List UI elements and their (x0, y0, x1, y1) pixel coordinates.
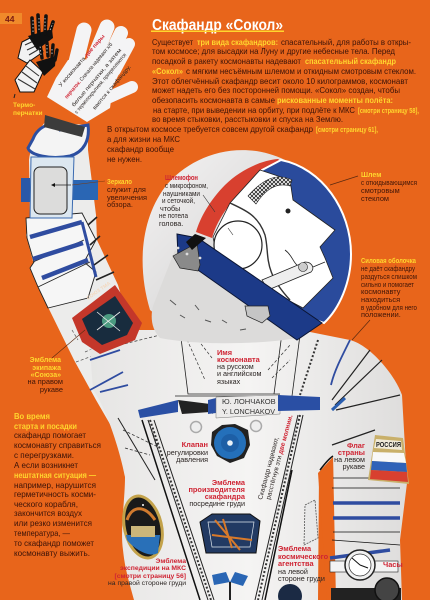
intro paragraph: Этот облегчённый скафандр весит около 10 килограммов, космонавт (152, 76, 408, 86)
red strip (196, 159, 282, 238)
glove caption: У космонавта две пары (58, 33, 107, 88)
label: space agency emblem: агентства (278, 559, 314, 568)
label: manufacturer emblem: скафандра (205, 492, 246, 501)
label: flag: на левом (334, 455, 365, 464)
label: restraint layer: находиться (361, 295, 400, 304)
label: mirror: обзора. (107, 200, 133, 209)
label: space agency emblem: космического (278, 552, 329, 561)
label: helmet: с откидывающимся (361, 178, 417, 187)
intro paragraph: а для жизни на МКС (107, 134, 180, 144)
glove with text: ваются к скафандру. (92, 65, 133, 111)
intro paragraph: спасательный, для работы в откры- (281, 37, 411, 47)
label: gloves: перчатки (13, 110, 43, 117)
name text (222, 397, 276, 416)
side text: launch and landing: с перегрузками. (14, 450, 74, 460)
label: flag: рукаве (342, 462, 365, 471)
label: cosmonaut name: космонавта (217, 355, 261, 364)
title: Скафандр «Сокол» (152, 17, 283, 34)
helmet (143, 150, 351, 343)
label: restraint layer: Силовая оболочка (361, 257, 416, 265)
blue collar bottom fastener (212, 572, 302, 600)
label: helmet: Шлем (361, 172, 381, 179)
visor interior (213, 170, 335, 308)
intro paragraph: посадкой в ракету космонавты надевают (152, 56, 301, 66)
label: mirror: Зеркало (107, 179, 132, 186)
label: mirror: служит для (107, 185, 146, 194)
name text: Ю. ЛОНЧАКОВ (222, 397, 276, 406)
label: cosmonaut name: на русском (217, 362, 254, 371)
arrow: helmet (330, 176, 358, 185)
label: headset: с микрофоном, (165, 181, 208, 190)
label: gloves (13, 102, 43, 117)
helmet lower neck dam (152, 250, 298, 343)
glove with text: белые перчатки, а затем (71, 47, 123, 108)
label: mirror (107, 179, 147, 209)
emblem: Soyuz crew patch (72, 281, 142, 354)
label: gloves: Термо- (13, 102, 35, 109)
mirror on cuff (21, 157, 98, 218)
label: restraint layer: положении. (361, 310, 401, 319)
label: restraint layer: в удобном для него (361, 303, 417, 312)
label: helmet: стеклом (361, 194, 389, 203)
label: space agency emblem: стороне груди (278, 574, 325, 583)
intro paragraph: спасательный скафандр (305, 56, 396, 66)
label: watch: Часы (383, 560, 403, 569)
left-arm folds (332, 350, 400, 445)
left shoulder seam dashes (123, 420, 158, 455)
intro paragraph: [смотри страницу 61], (316, 127, 378, 134)
emblem: suit manufacturer (200, 514, 260, 553)
page number: 44 (5, 14, 15, 24)
arrow: restraint layer (352, 320, 370, 340)
label: restraint layer: космонавту (361, 287, 401, 296)
label: manufacturer emblem: посредине груди (189, 499, 245, 508)
label: cosmonaut name: языках (217, 377, 241, 386)
name text: Y. LONCHAKOV (222, 407, 275, 416)
label: valve (167, 440, 208, 464)
label: manufacturer emblem (188, 478, 246, 508)
intro paragraph: Существует (152, 37, 193, 47)
centre zipper (255, 415, 303, 600)
label: valve: регулировки (167, 448, 208, 457)
intro paragraph: обезопасить космонавта в самые (152, 95, 275, 105)
flag patch: РОССИЯ (376, 442, 401, 449)
emblem: ISS expedition patch (116, 490, 170, 564)
label: Soyuz crew emblem: на правом (27, 377, 63, 386)
label: expedition emblem: на правой стороне груди (108, 579, 186, 587)
page number (0, 13, 22, 24)
side text: launch and landing: ческого корабля, (14, 499, 78, 509)
side text: launch and landing: например, нарушится (14, 480, 96, 490)
intro paragraph: на старте, при выведении на орбиту, при подлёте к МКС (153, 105, 355, 115)
intro paragraph: не нужен. (107, 154, 142, 164)
label: flag: страны (338, 448, 365, 457)
label: headset: Шлемофон (165, 173, 198, 182)
label: headset (159, 173, 208, 228)
collar lines (175, 330, 300, 396)
side text: launch and landing: температура, — (14, 528, 70, 538)
label: headset: голова. (159, 219, 183, 228)
intro paragraph: может надеть его без посторонней помощи. «Сокол» создан, чтобы (152, 85, 400, 95)
right zipper (148, 420, 214, 600)
side text: launch and landing: А если возникнет (14, 460, 78, 470)
label: manufacturer emblem: производителя (188, 485, 245, 494)
label: headset: наушниками (163, 189, 200, 198)
label: expedition emblem: экспедиции на МКС (120, 565, 186, 572)
shoulder blue stripes (90, 340, 350, 392)
blue visor (240, 160, 351, 323)
label: restraint layer: раздуться слишком (361, 272, 417, 281)
flag patch (368, 435, 409, 484)
label: headset: чтобы (160, 204, 180, 213)
intro paragraph: во время стыковки, расстыковки и спуска на Землю. (152, 114, 343, 124)
intro paragraph: скафандр вообще (107, 144, 174, 154)
arrow: mirror (72, 181, 105, 185)
label: helmet (361, 172, 417, 203)
label: restraint layer: сильно и помогает (361, 280, 414, 289)
side text: launch and landing: Во время (14, 411, 50, 421)
side text: launch and landing: закончится воздух (14, 508, 83, 518)
label: expedition emblem: Эмблема (156, 557, 186, 565)
label: Soyuz crew emblem: Эмблема (30, 356, 61, 364)
label: Soyuz crew emblem: «Союза» (31, 372, 61, 379)
side text: launch and landing (14, 411, 101, 558)
label: restraint layer: не даёт скафандру (361, 264, 415, 273)
label: cosmonaut name: Имя (217, 348, 232, 357)
label: Soyuz crew emblem: экипажа (32, 365, 61, 372)
side text: launch and landing: скафандр помогает (14, 430, 86, 440)
intro paragraph: «Сокол» (152, 66, 183, 76)
label: valve: давления (176, 455, 208, 464)
label: space agency emblem: Эмблема (278, 544, 312, 553)
intro paragraph: три вида скафандров: (197, 37, 278, 47)
white suit arm (26, 115, 180, 450)
label: cosmonaut name (217, 348, 261, 386)
label: space agency emblem (278, 544, 329, 583)
label: zippers note: Скафандр надевают, (257, 436, 281, 501)
side text: launch and landing: или резко изменится (14, 518, 92, 528)
side text: launch and landing: то скафандр поможет (14, 538, 94, 548)
intro paragraph: том космосе; для высадки на Луну и другие небесные тела. Перед (152, 46, 395, 56)
label: headset: не потела (159, 211, 188, 220)
arrow: Soyuz crew emblem (52, 330, 85, 358)
intro paragraph: В открытом космосе требуется совсем другой скафандр (107, 124, 313, 134)
label: expedition emblem: [смотри страницу 56] (114, 573, 186, 580)
label: restraint layer (361, 257, 417, 319)
side text: launch and landing: старта и посадки (14, 421, 77, 431)
side text: launch and landing: нештатная ситуация — (14, 470, 96, 480)
arrow: gloves label (14, 94, 15, 98)
intro paragraph: рискованные моменты полёта: (277, 95, 393, 105)
watch-strap at glove (44, 115, 85, 137)
label: cosmonaut name: и английском (217, 369, 261, 378)
arrow: headset (203, 195, 233, 235)
glove with text: перчаток. Сначала надевают х/б (64, 42, 114, 100)
label: Soyuz crew emblem (27, 356, 63, 394)
label: valve: Клапан (182, 440, 208, 449)
sleeve segments (26, 213, 96, 308)
intro paragraph (107, 37, 419, 164)
pressure valve (190, 420, 262, 463)
side text: launch and landing: космонавту выжить. (14, 548, 90, 558)
glove with text (47, 27, 133, 122)
visor frame (177, 234, 322, 340)
label: manufacturer emblem: Эмблема (212, 478, 246, 487)
side pocket (304, 500, 318, 545)
label: space agency emblem: на левой (278, 567, 308, 576)
wrist ring (28, 125, 88, 157)
label: flag (334, 441, 365, 471)
label: zippers note: расстёгнув эти две молнии. (265, 414, 295, 501)
label: expedition emblem (108, 557, 186, 587)
chest strap and name plate (138, 395, 320, 418)
microphone (262, 262, 313, 290)
label: mirror: увеличения (107, 193, 147, 202)
label: Soyuz crew emblem: рукаве (40, 385, 63, 394)
icon: thermal gloves (15, 15, 57, 92)
side text: launch and landing: космонавту справиться (14, 440, 101, 450)
side text: launch and landing: герметичность косми- (14, 489, 96, 499)
label: helmet: смотровым (361, 186, 400, 195)
label: headset: и сеточкой, (162, 196, 195, 205)
label: flag: Флаг (347, 441, 365, 450)
suit torso (90, 330, 407, 600)
patch text: СОЮЗ ТМА (86, 281, 112, 302)
glove with text: с термопокрытием, прикрепляются (74, 52, 128, 115)
wrist watches (330, 550, 401, 600)
